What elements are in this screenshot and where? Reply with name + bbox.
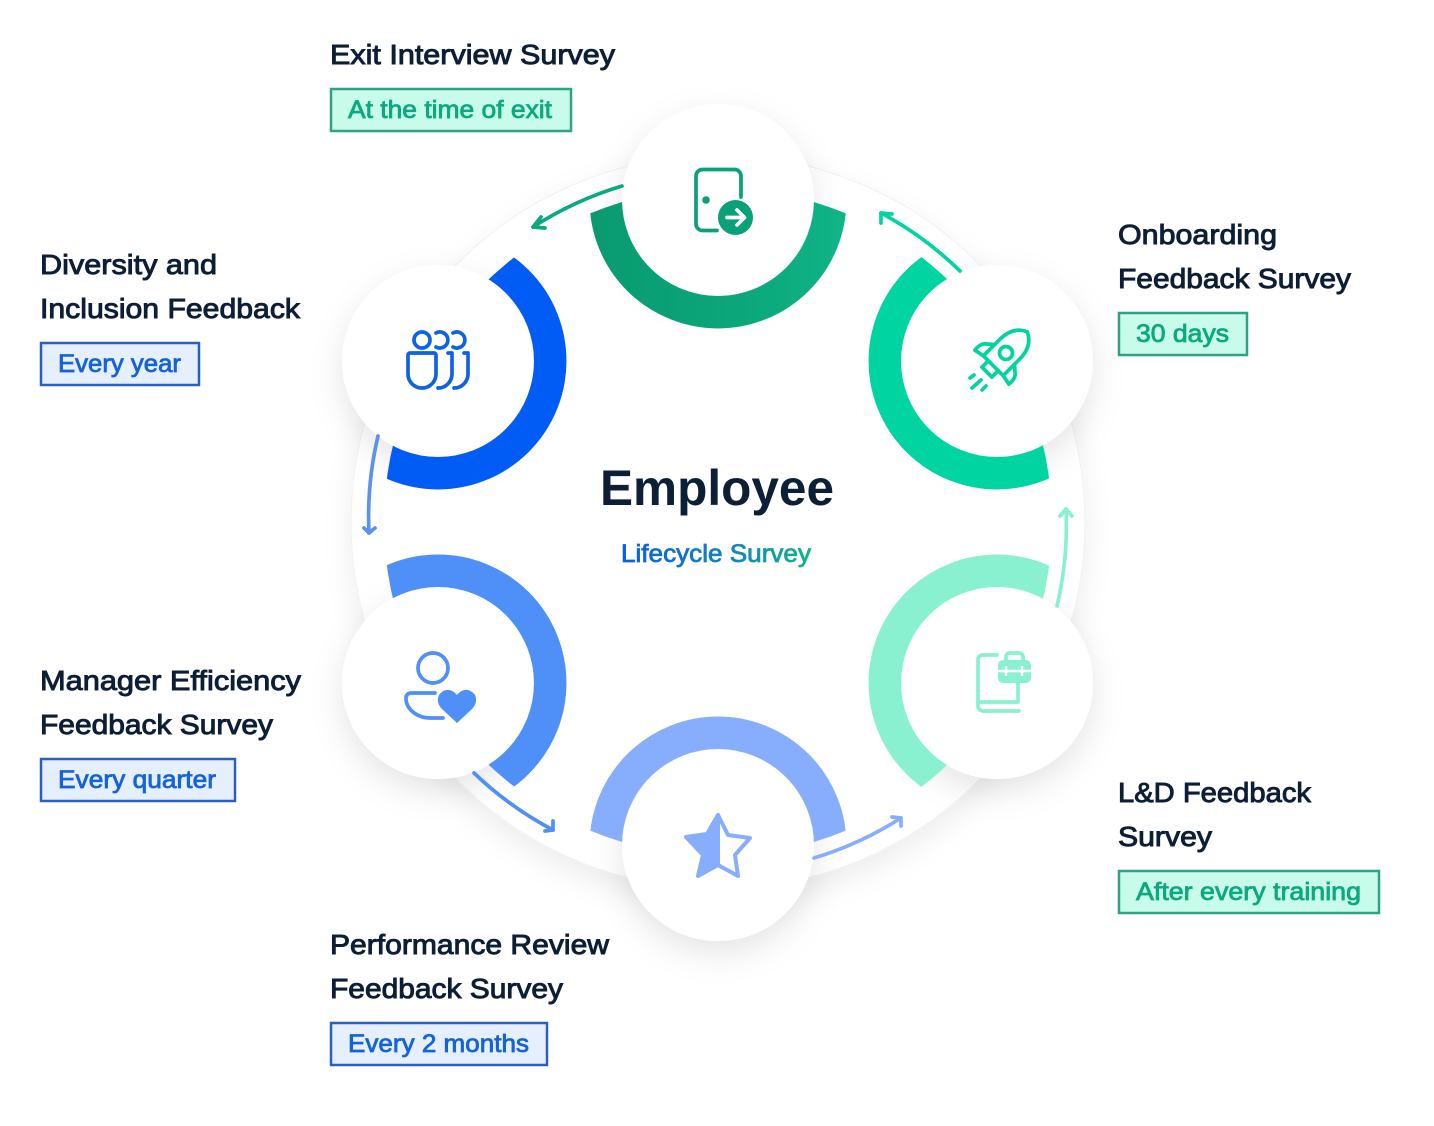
badge: every 2 months — [331, 1023, 547, 1065]
icon: rocket — [970, 315, 1044, 390]
arrow: diversity to manager — [364, 436, 378, 533]
heading: Performance Review — [330, 929, 610, 960]
label: manager efficiency feedback survey — [40, 665, 301, 801]
badge: every year — [41, 343, 199, 385]
subheading: Lifecycle Survey: Lifecycle Survey — [621, 540, 812, 568]
badge: after every training: After every training — [1136, 878, 1361, 906]
badge: every quarter: Every quarter — [58, 766, 216, 794]
label: diversity and inclusion feedback — [40, 249, 301, 385]
background circle — [351, 155, 1085, 889]
badge: at the time of exit: At the time of exit — [348, 96, 552, 124]
heading: Feedback Survey — [40, 709, 273, 740]
icon: half-filled star — [686, 815, 750, 876]
icon: book with briefcase — [978, 653, 1031, 711]
heading: Exit Interview Survey — [330, 39, 615, 70]
heading — [330, 929, 610, 1004]
heading: L&D Feedback — [1118, 777, 1312, 808]
arrow: L&D to onboarding — [1057, 509, 1072, 606]
arrow: onboarding to exit — [881, 213, 960, 271]
white node discs — [342, 104, 1093, 941]
badge: at the time of exit — [331, 89, 571, 131]
badge: every year: Every year — [58, 350, 181, 378]
heading: Survey — [1118, 821, 1212, 852]
heading: Feedback Survey — [1118, 263, 1351, 294]
badge: after every training — [1119, 871, 1379, 913]
heading: Employee: Employee — [600, 460, 834, 516]
badge: 30 days — [1119, 313, 1247, 355]
icon: door with exit arrow — [696, 170, 753, 235]
badge: every quarter — [41, 759, 235, 801]
heading: Feedback Survey — [330, 973, 563, 1004]
label: onboarding feedback survey — [1118, 219, 1351, 355]
heading — [40, 665, 301, 740]
label: exit interview survey — [330, 39, 615, 131]
icon: person with heart — [406, 653, 476, 723]
label: performance review feedback survey — [330, 929, 610, 1065]
heading — [1118, 219, 1351, 294]
badge: every 2 months: Every 2 months — [348, 1030, 529, 1058]
coloured ring segments — [386, 202, 1050, 842]
heading — [40, 249, 301, 324]
heading: Inclusion Feedback — [40, 293, 301, 324]
heading: Onboarding — [1118, 219, 1277, 250]
heading: Diversity and — [40, 249, 217, 280]
arrow: manager to performance — [474, 773, 553, 831]
heading — [1118, 777, 1312, 852]
badge: 30 days: 30 days — [1136, 320, 1229, 348]
arrow: exit to diversity — [533, 186, 622, 228]
arrow: performance to L&D — [814, 817, 901, 858]
icon: group of people — [408, 332, 468, 388]
heading: Manager Efficiency — [40, 665, 301, 696]
label: L&D feedback survey — [1118, 777, 1379, 913]
center title — [600, 460, 834, 568]
